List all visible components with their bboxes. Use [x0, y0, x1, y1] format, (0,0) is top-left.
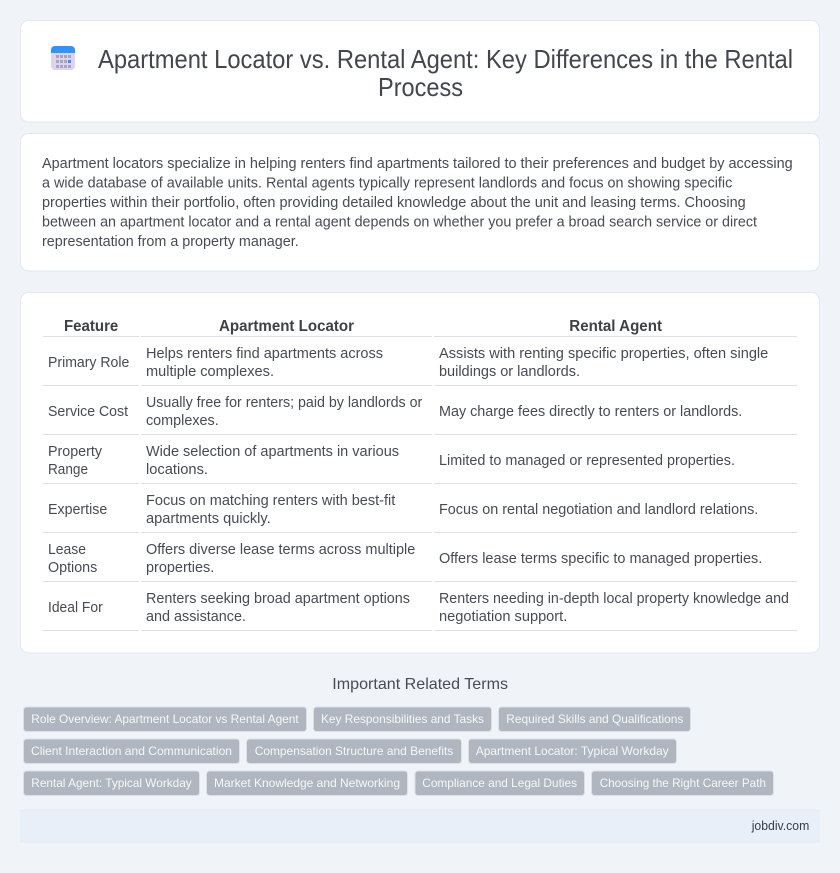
related term chips — [24, 707, 774, 796]
row: lease options: Options — [48, 560, 97, 576]
row: property range: Limited to managed or represented properties. — [439, 453, 735, 469]
title — [98, 46, 793, 102]
chip: market knowledge — [206, 771, 408, 796]
chip: compliance: Compliance and Legal Duties — [422, 776, 577, 790]
intro text: a wide database of available units. Rental agents typically represent landlords and focus on showing specific — [42, 175, 732, 191]
chip: career path: Choosing the Right Career Path — [600, 776, 766, 790]
row: lease options — [48, 542, 762, 576]
chip: key responsibilities: Key Responsibilities and Tasks — [321, 712, 484, 726]
row: primary role: buildings or landlords. — [439, 364, 580, 380]
row: service cost: complexes. — [146, 413, 219, 429]
intro text: representation from a property manager. — [42, 234, 299, 250]
table header: Apartment Locator — [219, 318, 354, 335]
chip: role overview — [24, 707, 306, 732]
chip: role overview: Role Overview: Apartment Locator vs Rental Agent — [31, 712, 299, 726]
row: expertise: Focus on rental negotiation and landlord relations. — [439, 502, 758, 518]
row: ideal for: Renters needing in-depth local property knowledge and — [439, 591, 789, 607]
row: property range: Range — [48, 462, 88, 478]
chip: rental agent workday: Rental Agent: Typical Workday — [31, 776, 192, 790]
row: ideal for: Ideal For — [48, 600, 103, 616]
chip: key responsibilities — [314, 707, 492, 732]
chip: compliance — [415, 771, 584, 796]
row: expertise: apartments quickly. — [146, 511, 271, 527]
row: service cost: Usually free for renters; paid by landlords or — [146, 395, 422, 411]
row: property range — [48, 444, 735, 478]
row: primary role: Assists with renting specific properties, often single — [439, 346, 768, 362]
row: primary role: Primary Role — [48, 355, 129, 371]
intro text: Apartment locators specialize in helping renters find apartments tailored to their preferences and budget by accessing — [42, 156, 793, 172]
chip: client interaction: Client Interaction and Communication — [31, 744, 232, 758]
chip: client interaction — [24, 739, 240, 764]
footer link: jobdiv.com — [751, 818, 809, 833]
chip: compensation: Compensation Structure and Benefits — [255, 744, 453, 758]
chip: apartment locator workday — [468, 739, 676, 764]
row: lease options: Lease — [48, 542, 86, 558]
row: primary role: multiple complexes. — [146, 364, 274, 380]
row: lease options: Offers diverse lease terms across multiple — [146, 542, 415, 558]
row: service cost: May charge fees directly to renters or landlords. — [439, 404, 742, 420]
icon: calendar — [51, 46, 75, 70]
panel: comparison table — [20, 292, 820, 653]
row: ideal for: Renters seeking broad apartment options — [146, 591, 410, 607]
chip: rental agent workday — [24, 771, 200, 796]
row: property range: Property — [48, 444, 103, 460]
intro text: between an apartment locator and a rental agent depends on whether you prefer a broad search service or direct — [42, 214, 757, 230]
row: ideal for — [48, 591, 789, 625]
panel: introduction — [20, 134, 820, 271]
row: primary role: Helps renters find apartments across — [146, 346, 383, 362]
footer — [20, 809, 820, 843]
row: property range: locations. — [146, 462, 208, 478]
panel: header — [20, 20, 820, 122]
intro text — [42, 156, 793, 250]
title: Apartment Locator vs. Rental Agent: Key Differences in the Rental — [98, 46, 793, 74]
table header — [64, 318, 662, 335]
table header: Feature — [64, 318, 119, 335]
row: ideal for: and assistance. — [146, 609, 246, 625]
row: lease options: properties. — [146, 560, 214, 576]
table header: Rental Agent — [569, 318, 662, 335]
row: expertise: Focus on matching renters with best-fit — [146, 493, 395, 509]
row: lease options: Offers lease terms specific to managed properties. — [439, 551, 762, 567]
heading: important related terms: Important Related Terms — [332, 676, 508, 693]
row: service cost: Service Cost — [48, 404, 128, 420]
chip: required skills — [498, 707, 690, 732]
chip: required skills: Required Skills and Qualifications — [506, 712, 683, 726]
row: ideal for: negotiation support. — [439, 609, 567, 625]
chip: market knowledge: Market Knowledge and Networking — [214, 776, 400, 790]
chip: apartment locator workday: Apartment Locator: Typical Workday — [476, 744, 669, 758]
row: property range: Wide selection of apartments in various — [146, 444, 399, 460]
row: service cost — [48, 395, 742, 429]
chip: compensation — [246, 739, 462, 764]
row: expertise: Expertise — [48, 502, 107, 518]
chip: career path — [592, 771, 774, 796]
intro text: properties within their portfolio, often providing detailed knowledge about the unit and leasing terms. Choosing — [42, 195, 746, 211]
title: Process — [378, 74, 463, 102]
row: expertise — [48, 493, 758, 527]
row: primary role — [48, 346, 768, 380]
